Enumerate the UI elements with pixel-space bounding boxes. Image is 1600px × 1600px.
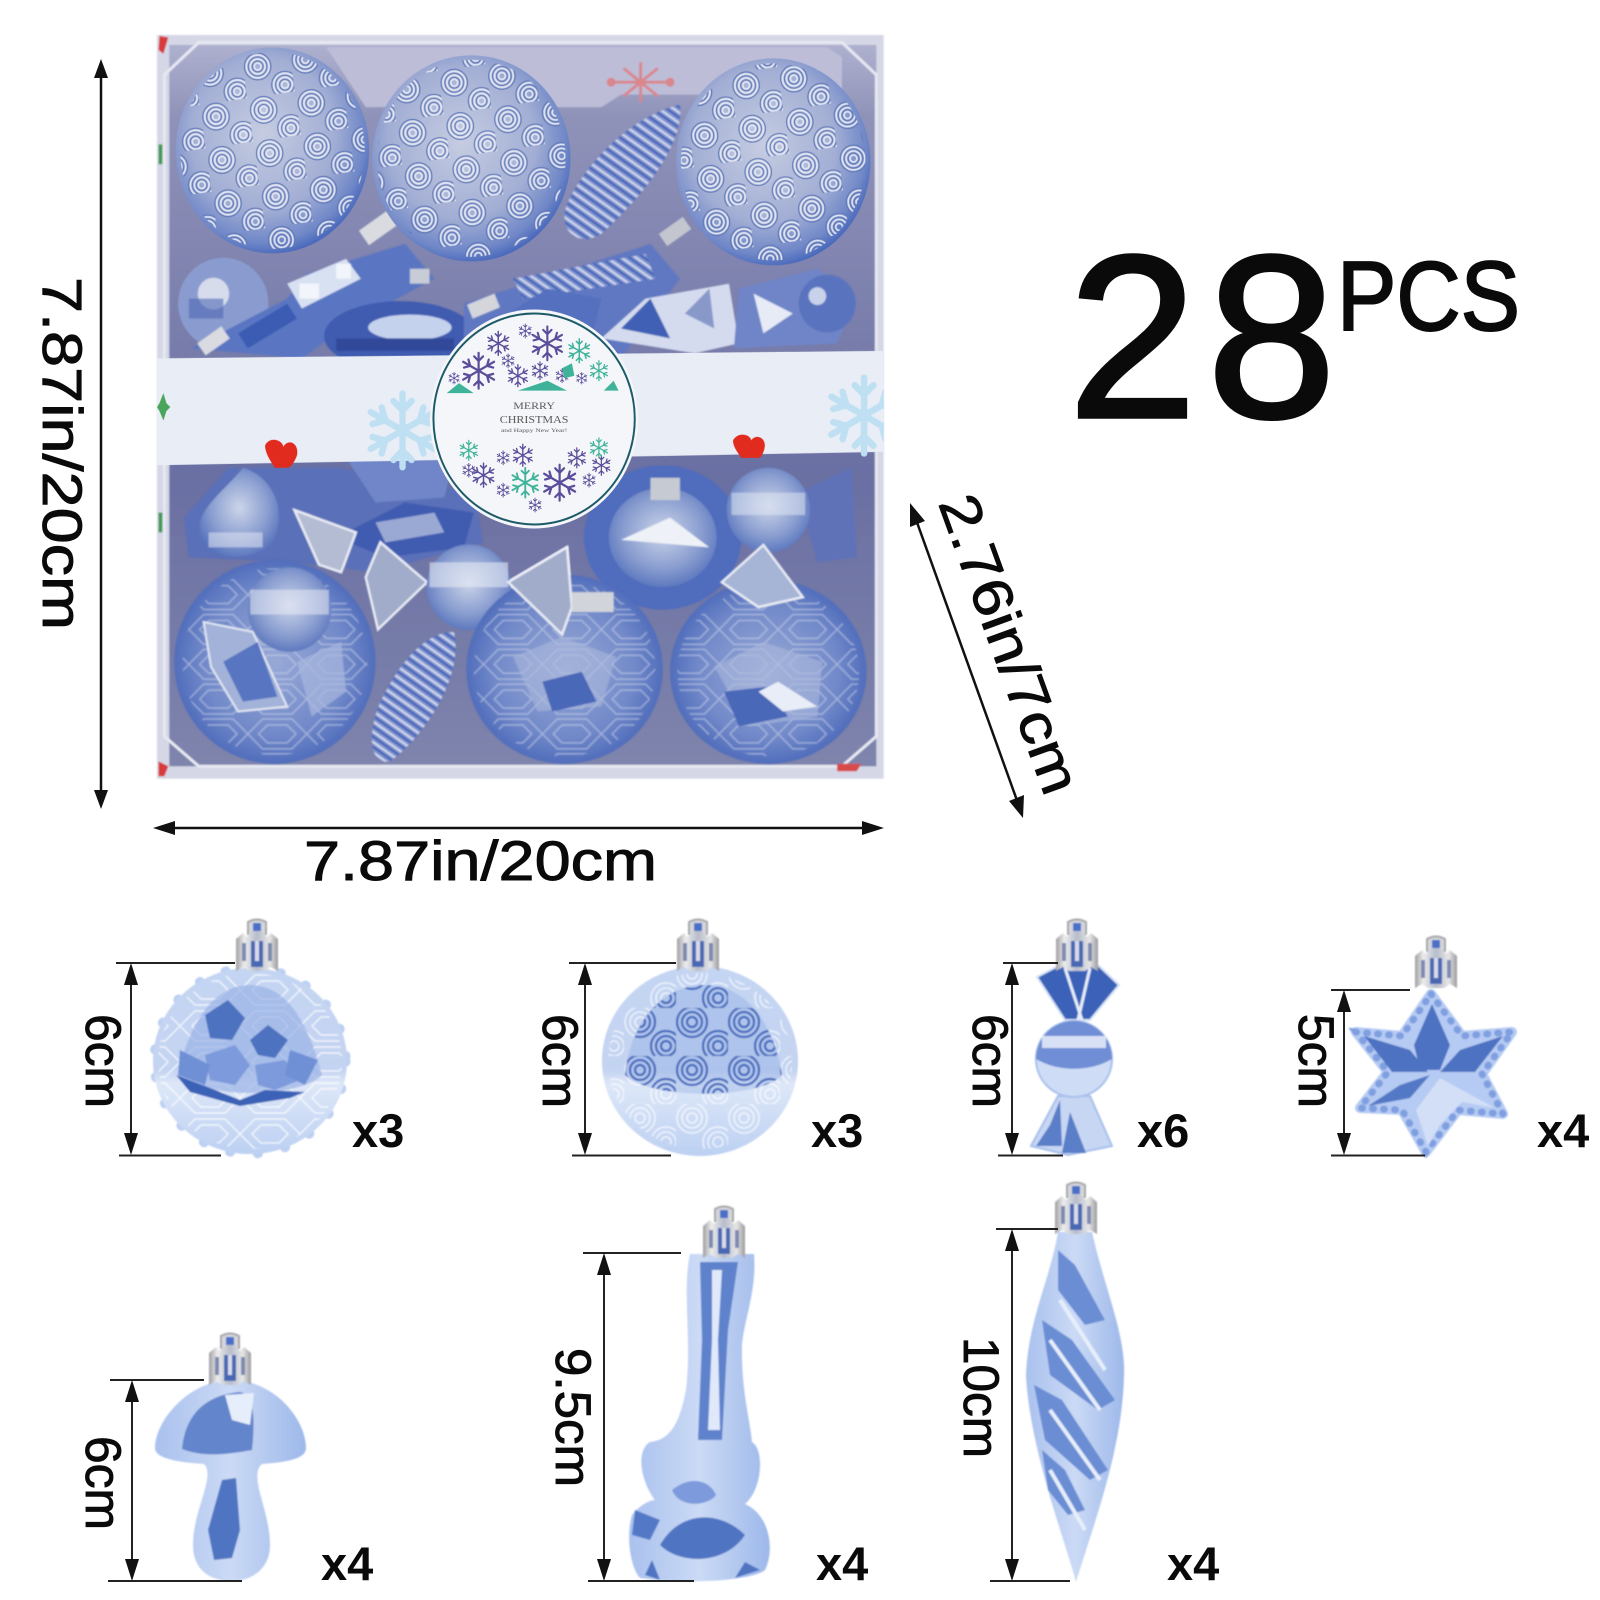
lower snowflake cluster (460, 438, 610, 512)
label: box width: 7.87in/20cm (304, 829, 657, 892)
upper snowflake cluster (449, 324, 607, 389)
icon: star ornament (1356, 936, 1512, 1152)
panel: product box photo (157, 35, 897, 779)
label: box depth: 2.76in/7cm (927, 486, 1093, 802)
label: 10cm: 10cm (953, 1337, 1009, 1458)
greeting: MERRY (513, 401, 555, 412)
round sticker: CHRISTMAS (500, 414, 568, 426)
item: hex ball (75, 920, 404, 1157)
quantity: x3: x3 (811, 1104, 863, 1157)
dimension: 6cm (569, 963, 676, 1156)
label: 6cm: 6cm (75, 1014, 131, 1108)
item: candy (962, 920, 1189, 1157)
label: 6cm: 6cm (75, 1436, 131, 1530)
dimension: 5cm (1331, 990, 1425, 1156)
quantity: x4: x4 (1537, 1104, 1589, 1157)
label: 6cm: 6cm (532, 1014, 588, 1108)
band decorations (157, 378, 897, 468)
quantity: x4: x4 (816, 1537, 868, 1590)
upper cluster teal fills (447, 363, 619, 393)
round sticker (430, 310, 638, 528)
ornament: pine cone bottom (372, 632, 456, 762)
icon: candy ornament (1031, 920, 1119, 1155)
icon: swirl ball ornament (602, 920, 798, 1156)
dimension: 6cm (998, 963, 1063, 1156)
arrow: box depth (910, 503, 1024, 818)
ornament: hex ball bottom middle (466, 547, 663, 764)
quantity: x4: x4 (321, 1537, 373, 1590)
icon: hex ball ornament (153, 920, 347, 1154)
dimension: 6cm (116, 963, 235, 1156)
round sticker: and Happy New Year! (501, 428, 567, 434)
dimension: 6cm (108, 1380, 242, 1581)
label: 5cm: 5cm (1288, 1014, 1344, 1108)
item: star (1288, 936, 1589, 1157)
label: 6cm: 6cm (962, 1014, 1018, 1108)
ornament: swirl ball top left (176, 47, 369, 253)
ornament: hex ball bottom right (670, 545, 866, 764)
item: mushroom (75, 1334, 373, 1590)
label: box height: 7.87in/20cm (31, 277, 94, 630)
item: snowman bottle (545, 1206, 868, 1590)
ornaments: middle lower row (184, 458, 857, 634)
item: icicle (953, 1182, 1219, 1590)
box base (157, 35, 884, 779)
quantity: x6: x6 (1137, 1104, 1189, 1157)
ornaments: middle upper row (178, 211, 857, 371)
dimension: 9.5cm (583, 1253, 694, 1581)
icon: mushroom ornament (155, 1334, 306, 1581)
item: swirl ball (532, 920, 863, 1157)
label: 9.5cm: 9.5cm (545, 1348, 601, 1487)
ornament: diagonal pine cone top (564, 105, 680, 239)
ornament: hex ball bottom left (174, 560, 376, 764)
icon: icicle ornament (1026, 1182, 1124, 1582)
ornament: swirl ball top middle (372, 55, 570, 261)
dimension: 10cm (990, 1229, 1070, 1581)
arrow: box height (94, 59, 108, 809)
quantity: x3: x3 (352, 1104, 404, 1157)
ornament: swirl ball top right (676, 58, 870, 265)
paper band (157, 351, 884, 465)
icon: snowman bottle ornament (629, 1206, 770, 1581)
headline: 28: 28 (1068, 208, 1336, 467)
headline: PCS: PCS (1337, 241, 1520, 351)
arrow: box width (153, 821, 884, 835)
quantity: x4: x4 (1167, 1537, 1219, 1590)
